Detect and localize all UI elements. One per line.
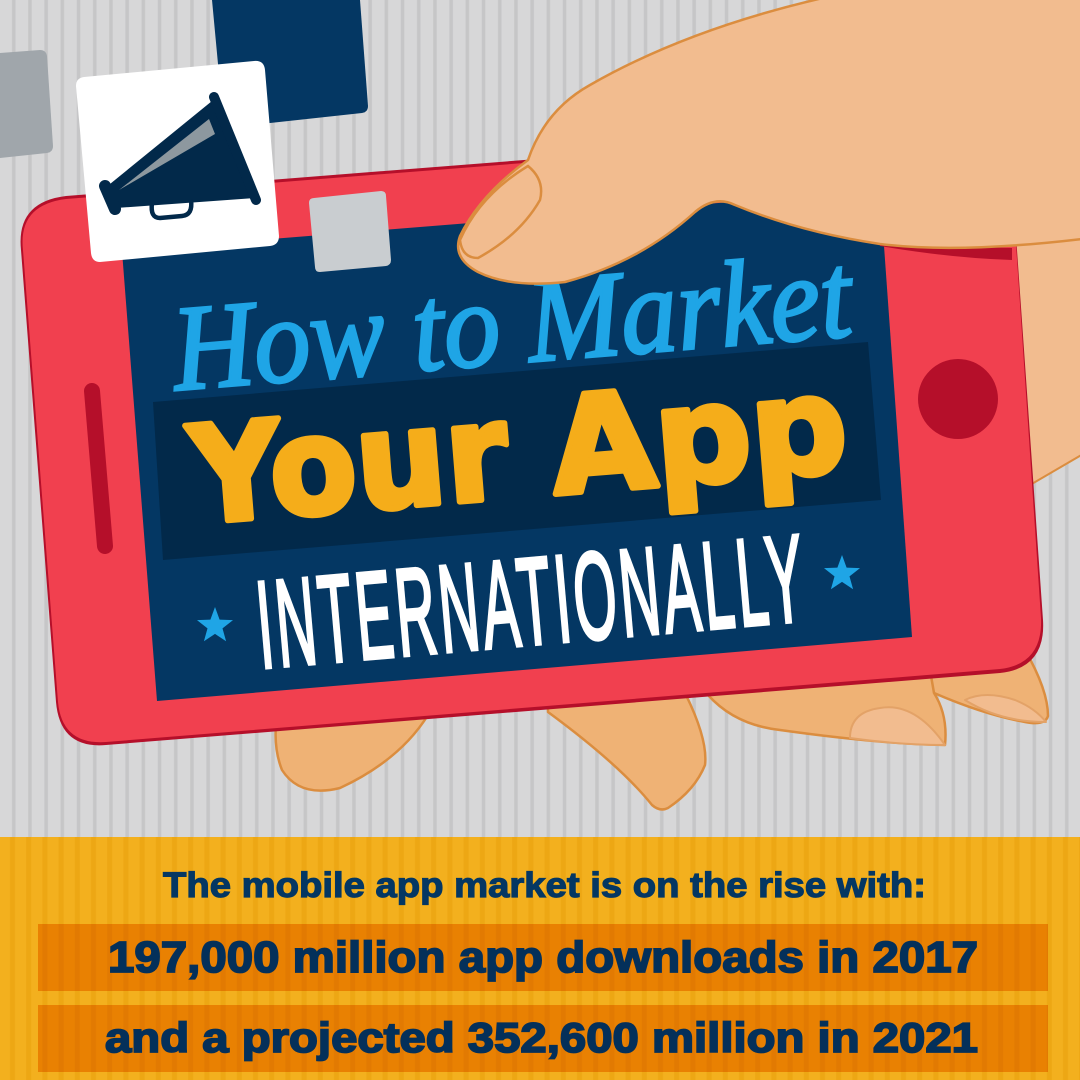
speaker bbox=[92, 391, 105, 546]
icon tile: megaphone bbox=[76, 61, 279, 262]
icon: megaphone bbox=[105, 97, 256, 218]
finger: left bbox=[276, 715, 428, 791]
phone body shadow bbox=[21, 122, 1043, 745]
icon tile: small grey bbox=[309, 191, 391, 272]
stat bar 2 bbox=[38, 1005, 1048, 1072]
finger: little bbox=[900, 650, 1048, 723]
finger: middle bbox=[548, 695, 705, 809]
title line 2: App bbox=[545, 347, 853, 526]
title line 2: Your bbox=[182, 374, 514, 555]
fingernail: little bbox=[965, 695, 1046, 722]
finger: ring bbox=[708, 670, 946, 745]
home button bbox=[918, 359, 998, 439]
title line 3: INTERNATIONALLY bbox=[251, 509, 809, 695]
panel background bbox=[0, 837, 1080, 1080]
icon: star left bbox=[197, 607, 233, 641]
square: grey tile bbox=[0, 50, 53, 158]
thumb shadow bbox=[880, 244, 1012, 260]
white tile bbox=[76, 61, 279, 262]
heading: The mobile app market is on the rise with: bbox=[163, 866, 926, 905]
phone screen bbox=[122, 190, 912, 701]
title line 1: How to Market bbox=[166, 228, 859, 417]
stat bar 1 bbox=[38, 924, 1048, 991]
hand: lower fingers bbox=[276, 650, 1048, 809]
panel: market stats bbox=[0, 837, 1080, 1080]
title band bbox=[153, 342, 881, 560]
stat text 2: and a projected 352,600 million in 2021 bbox=[105, 1014, 978, 1061]
title line 2 bbox=[182, 347, 853, 555]
phone body bbox=[23, 125, 1041, 742]
thumb nail bbox=[460, 166, 541, 258]
square: navy tile bbox=[212, 0, 368, 128]
stat text 1: 197,000 million app downloads in 2017 bbox=[108, 933, 978, 982]
phone bbox=[21, 122, 1043, 745]
thumb shape bbox=[458, 0, 1080, 284]
hand: thumb bbox=[458, 0, 1080, 284]
icon: star right bbox=[824, 555, 860, 589]
background stripes bbox=[0, 0, 1080, 838]
hand: palm bbox=[1000, 230, 1080, 485]
fingernail: ring bbox=[850, 707, 945, 745]
